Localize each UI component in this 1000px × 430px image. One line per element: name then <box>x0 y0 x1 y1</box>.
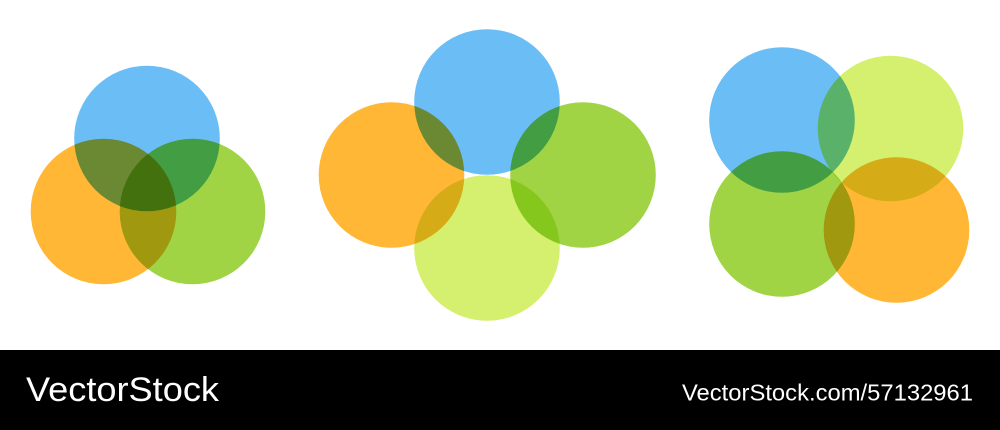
circle: bottom-right orange <box>824 157 969 303</box>
footer image id text: VectorStock.com/57132961 <box>682 380 973 406</box>
circle: left orange <box>319 102 464 248</box>
footer logo text: VectorStock <box>26 371 220 409</box>
circle: bottom lime <box>414 175 560 321</box>
diagram: four circles in cross arrangement <box>319 29 656 321</box>
diagram: three-circle venn <box>31 66 265 284</box>
circle: bottom-left green <box>709 151 855 297</box>
circle: top-left blue <box>709 47 855 193</box>
circle: top blue <box>414 29 560 175</box>
circle: top-right lime <box>818 56 963 201</box>
diagram: four circles in square arrangement <box>709 47 969 303</box>
circle: green <box>120 139 265 284</box>
circle: right green <box>510 102 656 248</box>
circle: orange <box>31 139 176 284</box>
footer bar <box>0 350 1000 430</box>
circle: blue <box>74 66 220 211</box>
